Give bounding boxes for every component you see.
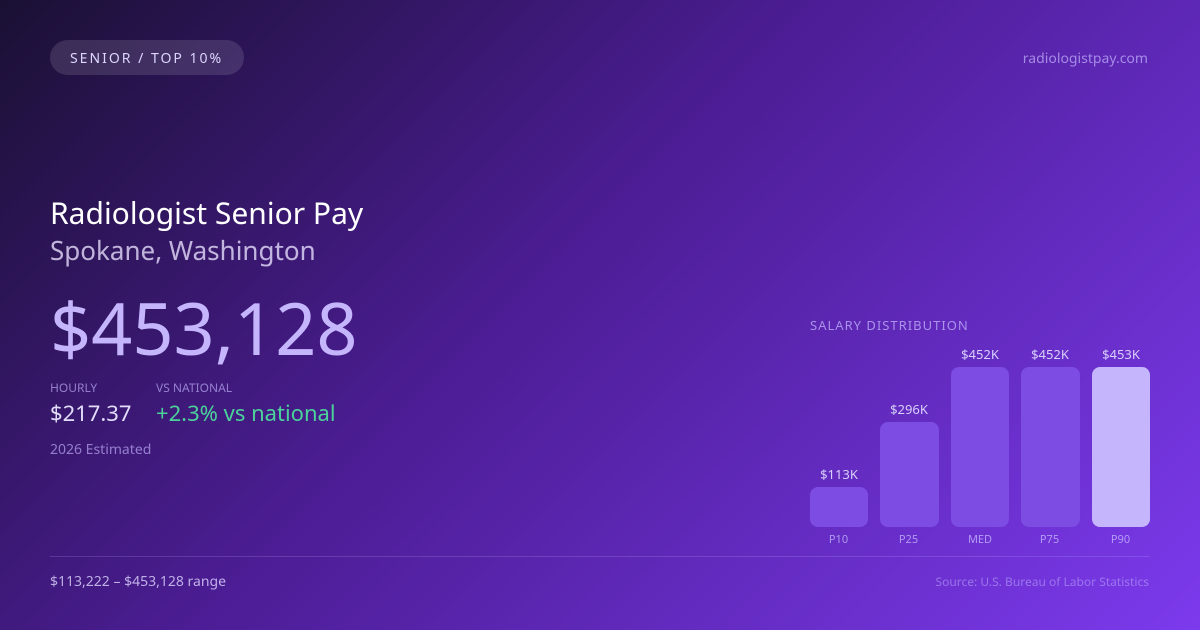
footer source: Source: U.S. Bureau of Labor Statistics (936, 573, 1149, 590)
bar P90 highlighted: $453K (1102, 345, 1140, 363)
bar P25 (880, 400, 939, 547)
bar MED (951, 345, 1009, 547)
bar P90 highlighted (1092, 345, 1150, 547)
bar P10: $113K (820, 465, 858, 483)
bar P75: $452K (1031, 345, 1069, 363)
title: Radiologist Senior Pay (50, 192, 363, 233)
bar P90 highlighted: P90 (1111, 532, 1130, 547)
footer divider (50, 556, 1150, 557)
bar MED: $452K (961, 345, 999, 363)
chart heading: SALARY DISTRIBUTION (810, 316, 969, 334)
stat: vs national: VS NATIONAL (156, 379, 232, 396)
bar P10: P10 (829, 532, 848, 547)
bar P75: P75 (1040, 532, 1059, 547)
stat: vs national: +2.3% vs national (156, 398, 336, 428)
stat: hourly: $217.37 (50, 398, 131, 428)
badge: senior / top 10%: SENIOR / TOP 10% (70, 49, 223, 68)
footer range: $113,222 – $453,128 range (50, 572, 226, 591)
stat: hourly (50, 379, 131, 428)
stat: hourly: HOURLY (50, 379, 97, 396)
bar P25: $296K (890, 400, 928, 418)
bar chart: salary distribution (810, 316, 1150, 547)
bar P10 (810, 465, 868, 547)
headline salary: $453,128 (50, 279, 358, 377)
bar P75 (1021, 345, 1080, 547)
year note: 2026 Estimated (50, 440, 151, 459)
bar P25: P25 (899, 532, 918, 547)
bar MED: MED (968, 532, 992, 547)
badge: senior / top 10% (50, 40, 244, 75)
site url: radiologistpay.com (1023, 49, 1148, 68)
subtitle: location: Spokane, Washington (50, 232, 316, 268)
stat: vs national (156, 379, 336, 428)
